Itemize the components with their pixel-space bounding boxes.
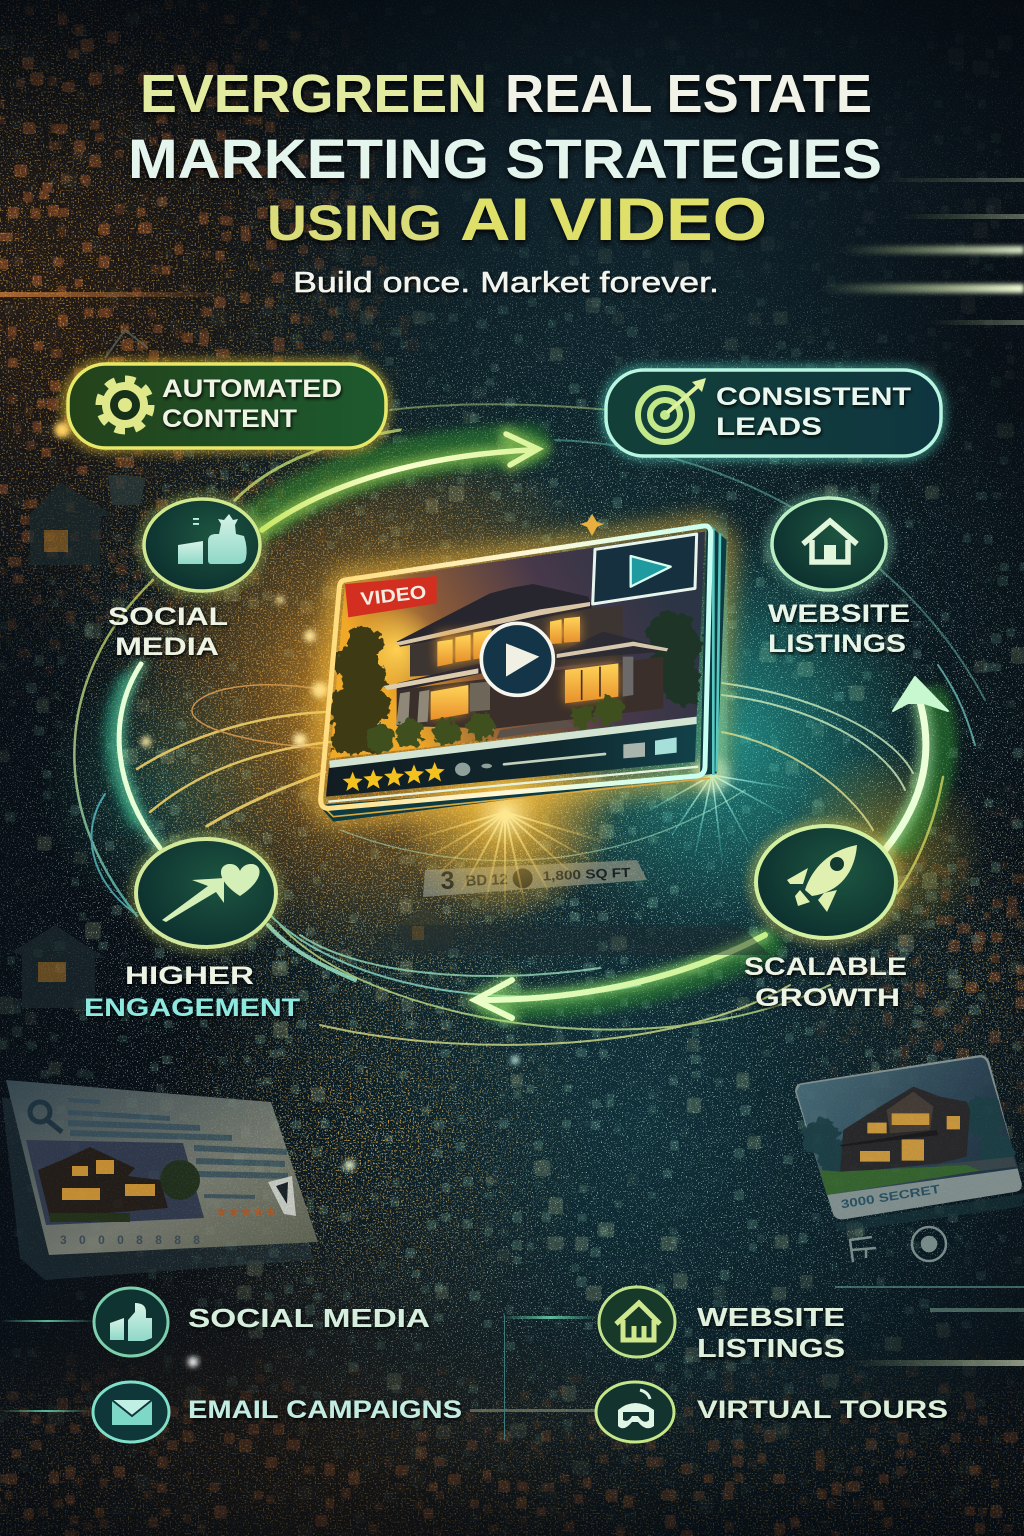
label: WEBSITE — [697, 1302, 845, 1332]
central glow behind video card — [120, 430, 985, 970]
label: HIGHER — [125, 962, 254, 990]
sparkle — [580, 514, 604, 536]
right swirl lines — [722, 683, 913, 830]
node: social media — [108, 497, 262, 661]
pill text: LEADS — [716, 413, 822, 441]
label: MEDIA — [115, 633, 219, 661]
title line 1: EVERGREEN — [140, 64, 487, 124]
small player tile — [593, 534, 697, 604]
label: SOCIAL MEDIA — [188, 1303, 430, 1333]
teal bright segment near higher engagement — [268, 925, 355, 980]
arrow: right arc upward — [885, 677, 948, 850]
icon: gear — [100, 380, 150, 430]
address text: 3 0 0 0 8 8 8 8 — [60, 1233, 200, 1247]
icon: thumbs up — [110, 1303, 152, 1341]
text lines — [68, 1098, 288, 1199]
small decorative icons — [850, 1227, 946, 1262]
title line 3: USING — [267, 195, 442, 251]
house photo — [797, 1057, 1018, 1195]
central play button — [481, 623, 553, 695]
left glowing arc — [119, 664, 160, 848]
title line 2: MARKETING STRATEGIES — [128, 127, 882, 190]
house photo — [26, 1140, 204, 1225]
left trees — [330, 625, 391, 753]
shrubs — [366, 696, 624, 752]
pill text — [716, 383, 911, 441]
title — [128, 64, 882, 253]
icon: rocket — [787, 845, 857, 912]
right trees — [647, 610, 702, 707]
icon: VR headset — [618, 1390, 654, 1428]
legend: email campaigns — [93, 1382, 462, 1442]
gold swirl lines — [137, 685, 745, 861]
pill text: CONTENT — [162, 405, 297, 433]
legend: social media — [94, 1288, 430, 1356]
label: WEBSITE — [768, 600, 910, 628]
video badge: VIDEO — [359, 581, 427, 609]
label: EMAIL CAMPAIGNS — [188, 1396, 462, 1424]
icon: thumbs up — [178, 514, 247, 564]
icon: arrow and heart — [162, 864, 260, 922]
legend: website listings — [599, 1287, 845, 1363]
label: SCALABLE — [744, 953, 907, 981]
card frame — [321, 526, 711, 808]
icon: house — [803, 521, 857, 562]
listing plate under card: 3 — [440, 866, 455, 895]
arrow: top arc clockwise — [262, 434, 538, 530]
rating stars — [343, 762, 445, 791]
icon: envelope — [112, 1400, 152, 1425]
title line 1 — [140, 64, 872, 124]
sparks near card — [141, 596, 519, 1367]
rating row: ★★★★★ — [216, 1205, 276, 1219]
house — [383, 584, 668, 728]
title line 1: REAL ESTATE — [505, 64, 872, 124]
video card — [317, 523, 727, 822]
label — [744, 953, 907, 1012]
node: higher engagement — [84, 837, 300, 1022]
orbit rings — [74, 404, 985, 1045]
title line 3 — [267, 186, 767, 253]
pill: automated content — [54, 364, 386, 448]
search icon — [30, 1102, 62, 1132]
screen — [330, 532, 705, 758]
light streaks upper right and left — [0, 178, 1024, 325]
node: website listings — [768, 496, 910, 658]
burst under card — [395, 702, 800, 922]
label: SOCIAL — [108, 603, 228, 631]
node: scalable growth — [744, 824, 907, 1012]
label — [108, 603, 228, 661]
listing card left — [2, 1080, 318, 1280]
listing plate under card: BD 12 — [465, 871, 508, 890]
listing card right — [795, 1055, 1024, 1232]
label — [697, 1302, 845, 1363]
label: VIRTUAL TOURS — [697, 1396, 948, 1424]
card glow — [317, 525, 725, 817]
icon: house — [616, 1303, 660, 1340]
arrow: bottom arc leftward — [475, 935, 765, 1018]
legend: virtual tours — [596, 1382, 948, 1442]
caption: 3000 SECRET — [840, 1182, 942, 1211]
label: GROWTH — [755, 984, 900, 1012]
faint background houses — [12, 330, 455, 1008]
pill text — [162, 375, 342, 433]
control bar — [326, 718, 697, 797]
outer thin orbit lines — [74, 404, 985, 1045]
video badge — [345, 576, 437, 617]
icon: target — [638, 378, 706, 442]
subtitle: Build once. Market forever. — [293, 267, 719, 299]
label — [84, 962, 300, 1022]
green ribbons under the arrows — [111, 445, 943, 1006]
pill: consistent leads — [606, 370, 941, 456]
pill text: CONSISTENT — [716, 383, 911, 411]
label: ENGAGEMENT — [84, 994, 300, 1022]
pill text: AUTOMATED — [162, 375, 342, 403]
label: LISTINGS — [697, 1333, 845, 1363]
listing plate under card — [360, 859, 770, 955]
label: LISTINGS — [768, 630, 906, 658]
card thickness — [318, 523, 727, 822]
legend guide lines — [0, 1286, 1024, 1440]
label — [768, 600, 910, 658]
title line 3: AI VIDEO — [460, 186, 767, 253]
listing plate under card: 1,800 SQ FT — [542, 865, 631, 884]
